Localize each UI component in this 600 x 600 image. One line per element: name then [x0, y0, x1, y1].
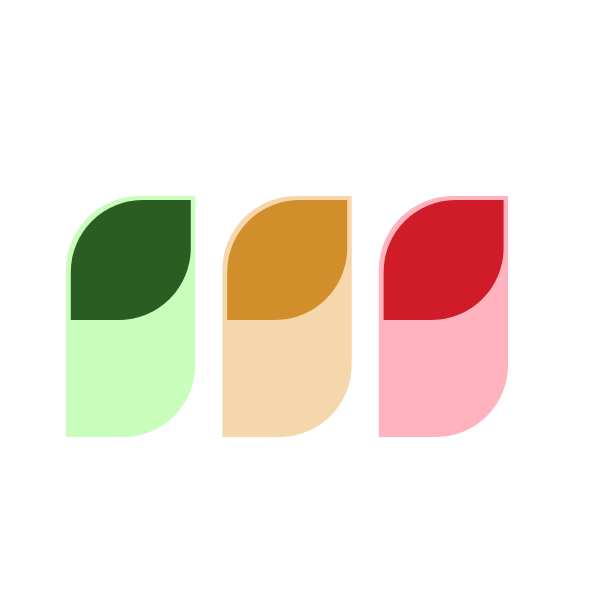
- orange inner leaf: [227, 200, 347, 320]
- green inner leaf: [71, 200, 191, 320]
- card: orange: [222, 196, 352, 437]
- green outer shape: [66, 196, 195, 437]
- card: green: [66, 196, 195, 437]
- red inner leaf: [384, 200, 504, 320]
- card: red: [379, 196, 508, 437]
- orange outer shape: [222, 196, 352, 437]
- pink outer shape: [379, 196, 508, 437]
